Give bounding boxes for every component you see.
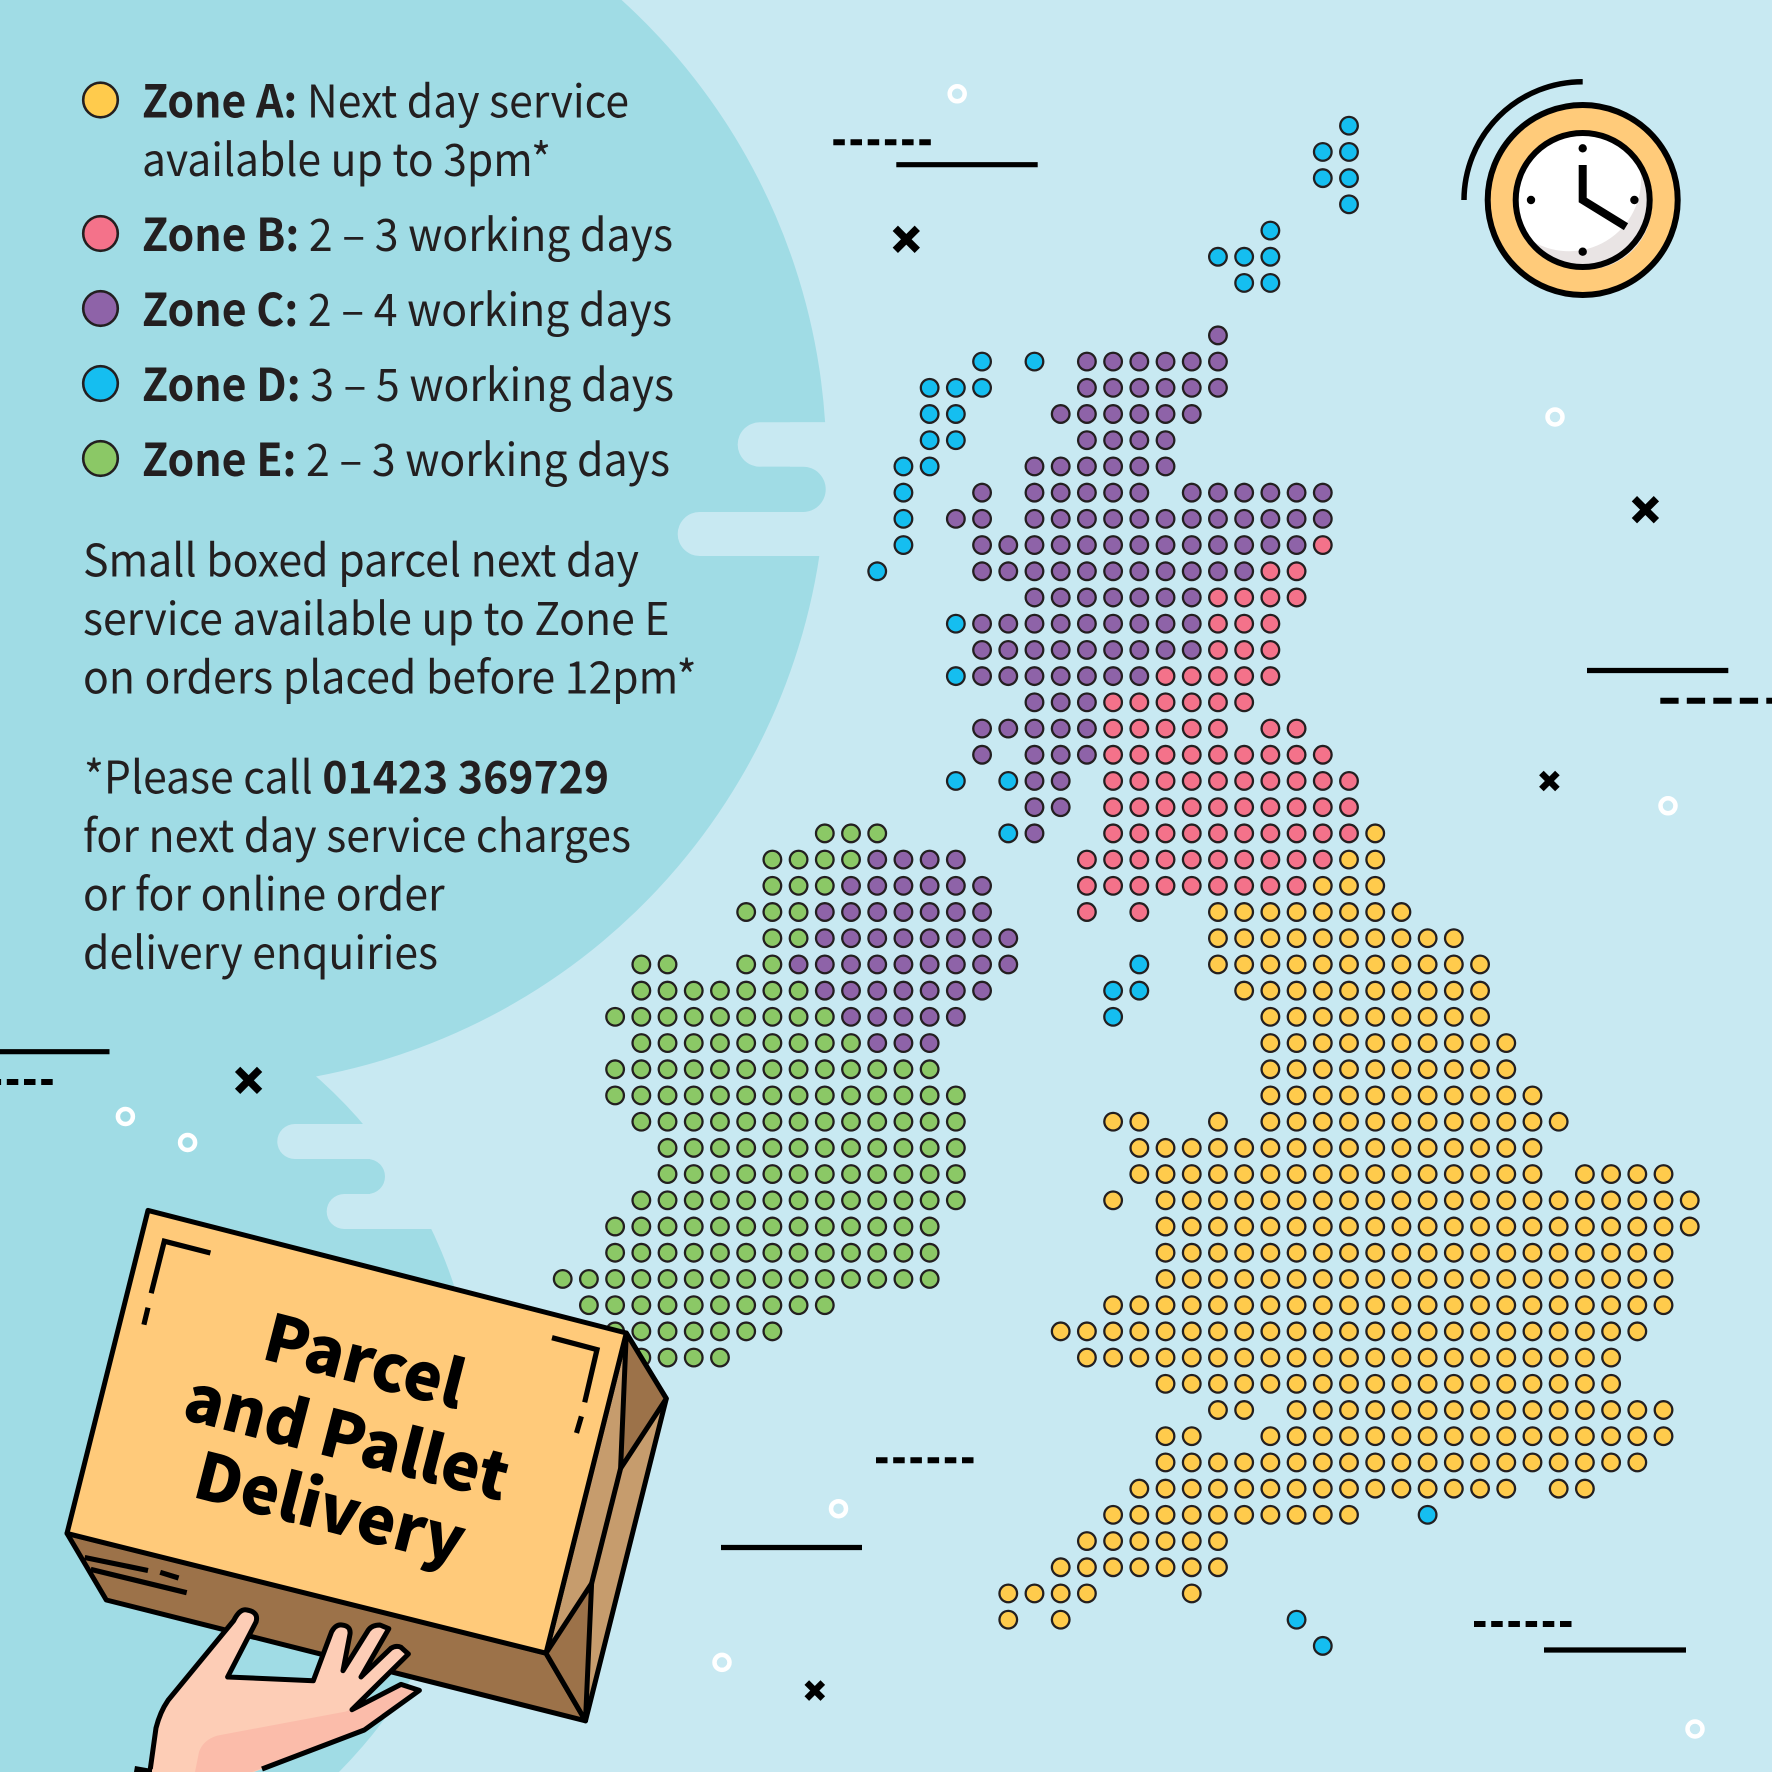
text block: phone enquiries: delivery enquiries — [83, 917, 438, 982]
legend: zone D: Zone D: 3 – 5 working days — [142, 349, 674, 414]
text block: phone enquiries: or for online order — [83, 858, 445, 924]
illustration: parcel box held by hand — [67, 1210, 666, 1772]
map: dot map of UK and Ireland by zone — [563, 126, 1690, 1646]
legend — [83, 66, 674, 489]
zone B dots — [1087, 545, 1349, 912]
icon: clock — [1464, 82, 1678, 295]
box: corner marks — [144, 1241, 597, 1433]
legend: zone A: Zone A: Next day service — [142, 66, 629, 130]
box title: Delivery — [186, 1424, 476, 1583]
box title: and Pallet — [176, 1346, 520, 1519]
legend: zone A: available up to 3pm* — [142, 124, 551, 189]
box: side face — [546, 1333, 666, 1721]
zone D dots — [877, 126, 1428, 1646]
text block: phone enquiries: *Please call 01423 369729 — [84, 742, 609, 806]
legend: zone C: Zone C: 2 – 4 working days — [142, 274, 672, 339]
text block: small boxed parcel: service available up to Zone E — [83, 583, 670, 648]
text block: small boxed parcel: on orders placed before 12pm* — [83, 642, 697, 706]
panel: dark blue background blob — [0, 0, 860, 1772]
decorative crosses — [238, 228, 1656, 1699]
box: bottom face — [67, 1533, 586, 1721]
box: top face — [67, 1210, 626, 1653]
zone E dots — [563, 833, 956, 1358]
text block: small boxed parcel — [83, 524, 697, 706]
legend: zone E: Zone E: 2 – 3 working days — [142, 424, 670, 489]
text block: phone enquiries — [83, 742, 631, 982]
box title: Parcel — [255, 1286, 476, 1428]
box: shipping label lines — [85, 1558, 187, 1593]
legend: zone B: Zone B: 2 – 3 working days — [142, 199, 673, 264]
box title — [176, 1286, 520, 1583]
text block: phone enquiries: for next day service charges — [83, 800, 631, 865]
zone A dots — [1008, 833, 1690, 1620]
zone C dots — [799, 335, 1323, 1043]
legend: zone A — [83, 66, 629, 189]
text block: small boxed parcel: Small boxed parcel next day — [83, 524, 639, 590]
hand — [134, 1610, 419, 1772]
